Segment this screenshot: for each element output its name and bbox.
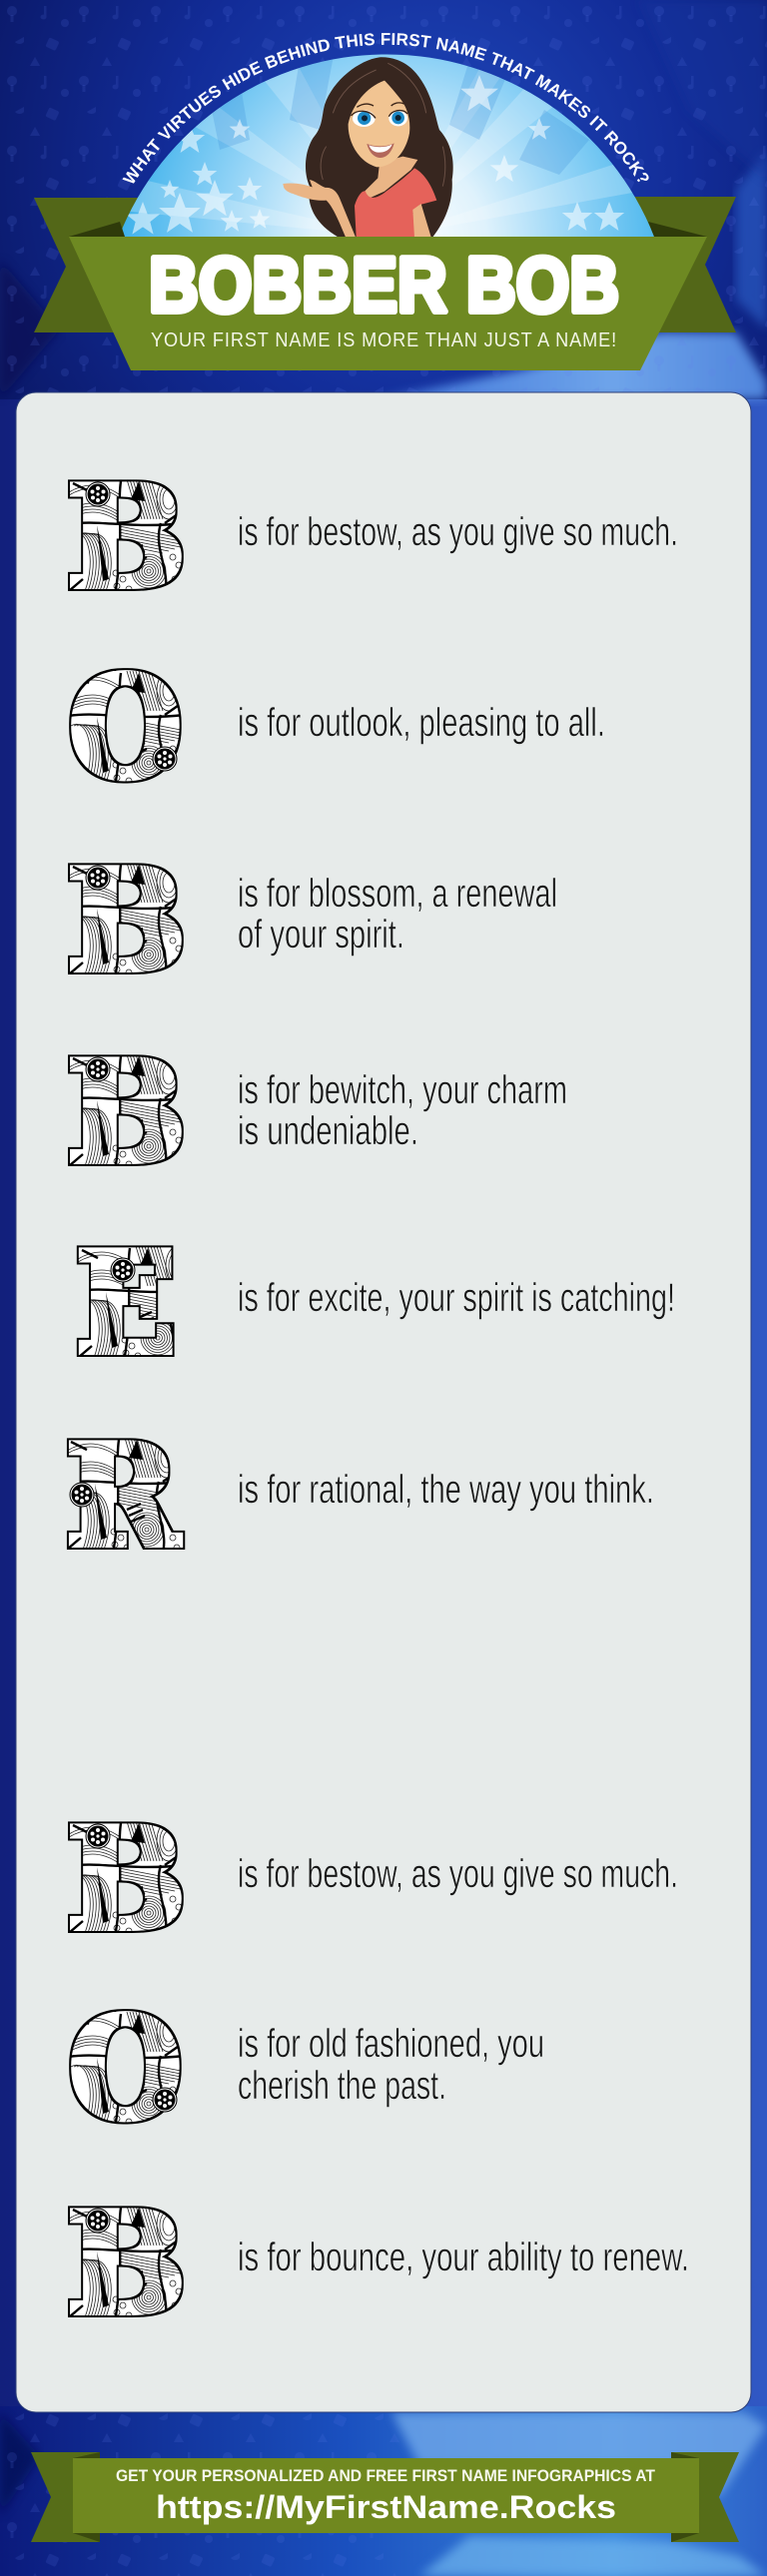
row: B bestow	[67, 455, 678, 619]
title: BOBBER BOB	[149, 241, 619, 328]
hair highlights	[321, 63, 445, 187]
ribbon front	[69, 237, 707, 370]
row: B bewitch: B	[67, 1030, 186, 1194]
footer url: https://MyFirstName.Rocks	[156, 2489, 616, 2525]
footer line one: GET YOUR PERSONALIZED AND FREE FIRST NAME INFOGRAPHICS AT	[116, 2466, 656, 2485]
row: B blossom	[67, 839, 557, 1002]
row: O outlook	[69, 646, 605, 809]
row: B blossom: B	[67, 839, 186, 1002]
ribbon folds	[69, 222, 125, 237]
row: O outlook: O	[69, 646, 182, 809]
row: B bestow: B	[67, 455, 186, 619]
face	[349, 81, 409, 167]
ribbon tails	[34, 197, 736, 332]
row: B bounce	[67, 2183, 689, 2344]
row: R rational: R	[66, 1414, 180, 1578]
row: B bestow second	[67, 1797, 678, 1961]
footer ribbon	[31, 2452, 739, 2542]
neck and chest	[365, 157, 417, 198]
subtitle: YOUR FIRST NAME IS MORE THAN JUST A NAME!	[151, 328, 617, 351]
right arm	[412, 204, 431, 237]
mouth	[367, 143, 394, 158]
main ribbon	[69, 222, 707, 370]
woman character	[283, 57, 453, 237]
eyes	[353, 110, 376, 127]
row: B bewitch: is for bewitch, your charm	[238, 1068, 567, 1112]
shirt	[355, 168, 436, 237]
curved heading: WHAT VIRTUES HIDE BEHIND THIS FIRST NAME THAT MAKES IT ROCK?	[122, 33, 649, 184]
row: R rational	[66, 1414, 654, 1578]
row: B bestow second: B	[67, 1797, 186, 1961]
panel: letters	[16, 392, 751, 2412]
row: B blossom: is for blossom, a renewal	[238, 872, 557, 916]
row: E excite	[76, 1222, 675, 1384]
row: O old fashioned: cherish the past.	[238, 2064, 446, 2108]
left hand and arm	[283, 180, 356, 237]
row: B bewitch	[67, 1030, 567, 1194]
row: B blossom: of your spirit.	[238, 913, 404, 957]
row: E excite: E	[76, 1222, 176, 1384]
dome with sunburst and stars	[122, 54, 654, 237]
row: B bounce: B	[67, 2183, 186, 2344]
row: O old fashioned: is for old fashioned, you	[238, 2022, 544, 2066]
hair	[306, 57, 453, 237]
row: O outlook: is for outlook, pleasing to all.	[238, 701, 605, 745]
row: O old fashioned	[69, 1987, 544, 2150]
eyelids and brows	[352, 103, 407, 118]
row: B bewitch: is undeniable.	[238, 1109, 418, 1153]
row: O old fashioned: O	[69, 1987, 182, 2150]
